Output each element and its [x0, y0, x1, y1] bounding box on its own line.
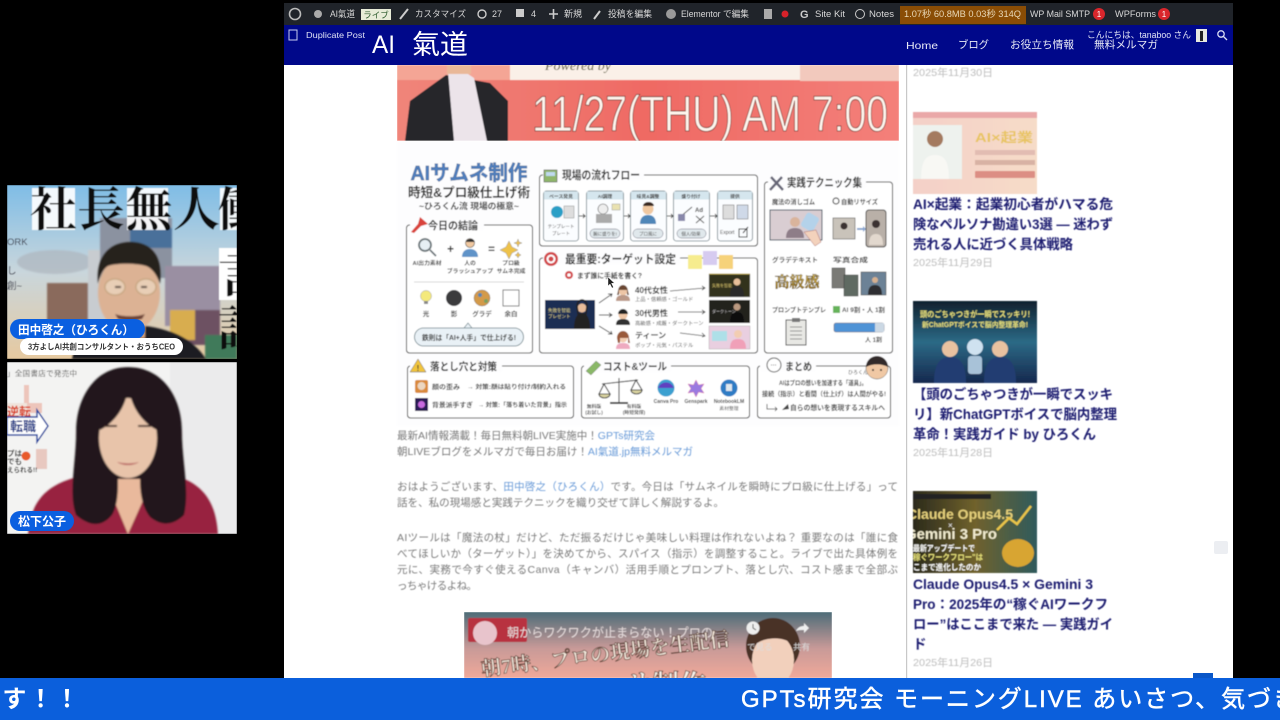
post: Claude Opus and Gemini: [905, 491, 1113, 669]
watch later caption: で見る: [747, 642, 773, 652]
step: tasting: プロ風に: [639, 232, 657, 238]
thumbnail: gold coins: [905, 491, 1037, 573]
icon: white space square: [503, 290, 519, 306]
step: tasting: 味見&調整: [637, 193, 660, 200]
icon: target: [544, 252, 558, 266]
technique: gradient text: [772, 255, 820, 291]
step: serving: Export: [720, 230, 735, 236]
summary text: [762, 378, 886, 398]
step: serving: 提供: [730, 193, 740, 200]
thumbnail: gold coins: Gemini 3 Pro: [905, 526, 997, 543]
step: plating: [674, 191, 710, 241]
icon: picture: [544, 170, 557, 182]
icon: wordpress logo: [290, 8, 300, 20]
rule bubble: 鉄則は「AI+人手」で仕上げる!: [422, 333, 516, 342]
step: plating: Ad: [695, 208, 703, 214]
host portrait: [746, 618, 800, 686]
share caption: 共有: [793, 642, 810, 652]
factor labels: 余白: [504, 309, 518, 318]
site name: AI氣道: [330, 8, 355, 19]
webcam: Matsushita: [7, 362, 237, 534]
icon: warning: !: [417, 364, 419, 373]
tool: Canva Pro: Canva Pro: [654, 399, 678, 405]
persona: women in 40s: 上品・信頼感・ゴールド: [635, 295, 693, 303]
tool: Genspark: Genspark: [684, 399, 708, 405]
script caption: Powered by: [544, 59, 612, 74]
thumbnail: dark: ダークトーン: [712, 308, 736, 314]
post title: 険なペルソナ勘違い3選 ― 迷わず: [913, 216, 1113, 232]
site kit: [800, 9, 846, 21]
icon: share: [796, 623, 809, 633]
wpforms: WPForms: [1115, 9, 1157, 19]
heading: 現場の流れフロー: [562, 168, 640, 182]
panel: practical techniques: [764, 176, 892, 353]
site kit: G: [800, 9, 809, 21]
persona: men in 30s: [616, 308, 704, 327]
post title: ロー”はここまで来た ― 実践ガイ: [913, 616, 1113, 632]
back to top tab: [1193, 673, 1213, 679]
background captions: し: [7, 266, 17, 277]
post title: 売れる人に近づく具体戦略: [913, 236, 1073, 252]
title tag: Tanaka: [20, 338, 183, 355]
tool: Genspark: [684, 380, 708, 405]
factor labels: [423, 309, 518, 318]
step: base discovery: プレート: [552, 231, 570, 237]
presenter: [72, 242, 206, 359]
persona: women in 40s: [616, 285, 693, 303]
post title: [913, 196, 1114, 252]
icon: search: [1218, 31, 1227, 40]
technique: photo composite: [832, 255, 886, 296]
icon: person brush-up: [462, 238, 478, 257]
comment counter: 4: [531, 9, 536, 19]
presenter: [28, 367, 218, 534]
promotion line: GPTs: 最新AI情報満載！毎日無料朝LIVE実施中！GPTs研究会: [397, 429, 656, 442]
panel: summary: [758, 356, 890, 418]
name tag: Matsushita: 松下公子: [18, 514, 66, 528]
book advert: えられる!!: [7, 465, 37, 474]
post title: 【頭のごちゃつきが一瞬でスッキ: [913, 386, 1113, 402]
sample thumbnail: 失敗を智能: [548, 307, 571, 314]
hero banner: [397, 59, 899, 142]
heading: コスト&ツール: [603, 361, 667, 373]
panel: today's conclusion: [406, 217, 532, 353]
post title: [913, 577, 1113, 652]
icon: site: [314, 10, 322, 18]
subheading: [565, 271, 642, 280]
icon: magnifier: [419, 239, 436, 256]
step: AI cooking: [586, 191, 624, 241]
step: base discovery: [544, 191, 578, 241]
greeting paragraph: [397, 480, 898, 509]
factor labels: グラデ: [472, 309, 492, 318]
website page background: [284, 3, 1233, 678]
icon: warning: [410, 359, 426, 373]
customize item: [400, 8, 466, 19]
technique: magic eraser: 魔法の消しゴム: [772, 197, 815, 206]
step: AI cooking: AI調理: [598, 193, 612, 200]
infographic: AI thumbnail production: [397, 141, 899, 426]
icon: sparkles: [500, 239, 522, 259]
technique: auto resize: [833, 197, 886, 247]
persona: teens: ティーン: [635, 331, 666, 340]
logo: AI: [372, 31, 395, 59]
book advert: [7, 385, 48, 474]
technique: prompt template: [772, 306, 826, 345]
wp mail smtp: WP Mail SMTP: [1030, 9, 1090, 19]
background buildings: [47, 218, 237, 359]
post title: 革命！実践ガイド by ひろくん: [913, 426, 1096, 442]
post title: リ】新ChatGPTボイスで脳内整理: [913, 406, 1117, 422]
book title glyphs: 働: [218, 185, 265, 237]
new item: 新規: [564, 9, 582, 19]
flow arrows: [579, 214, 717, 218]
thumbnail: two men and a robot: 頭のごちゃつきが一瞬でスッキリ!: [920, 309, 1030, 319]
thumbnail: AI and startups: [913, 112, 1037, 194]
name tag: Tanaka: 田中啓之（ひろくん）: [18, 322, 134, 337]
conclusion labels: 人の: [464, 260, 476, 267]
step: AI cooking: 腕に盛りを!: [593, 230, 617, 238]
tool: NotebookLM: 素材整理: [719, 405, 739, 412]
conclusion labels: プロ級: [502, 259, 520, 267]
step: base discovery: ベース発見: [549, 193, 573, 200]
greeting paragraph: 話を、私の現場感と実践テクニックを織り交ぜて詳しく解説するよ。: [397, 496, 724, 509]
technique: prompt template: プロンプトテンプレ: [772, 306, 826, 314]
notes: [856, 9, 895, 19]
post date: 2025年11月29日: [913, 256, 993, 269]
article intro text: [397, 429, 898, 592]
background captions: ORK: [7, 237, 28, 248]
elementor edit: Elementor で編集: [681, 8, 749, 19]
logo: 氣道: [412, 30, 468, 60]
row: flashy background: [415, 398, 567, 411]
row: flashy background: 背景派手すぎ: [432, 400, 474, 409]
step: base discovery: テンプレート: [548, 224, 574, 230]
book advert: 逆転: [7, 404, 31, 419]
background captions: [7, 237, 28, 292]
book title glyphs: 社長無人: [30, 185, 220, 237]
summary callout: 自らの想いを表現するスキルへ: [790, 403, 885, 412]
floating widget icon: [1214, 541, 1228, 554]
heading: 落とし穴と対策: [430, 360, 497, 373]
technique: gradient text: グラデテキスト: [772, 255, 818, 264]
technique: AI ninety percent: 人 1割: [865, 336, 882, 344]
wpforms: 1: [1162, 10, 1167, 19]
panel: on-site workflow: [540, 168, 758, 246]
presenter photo: [405, 65, 508, 141]
post: ChatGPT voice: [913, 301, 1117, 459]
name tag: Tanaka: [10, 319, 145, 339]
thumbnail: gold: 失敗を智能: [712, 282, 732, 288]
conclusion labels: [412, 259, 526, 275]
heading: まとめ: [785, 361, 812, 373]
nav: useful info: お役立ち情報: [1010, 38, 1075, 51]
thumbnail: two men and a robot: [913, 301, 1037, 383]
factor labels: 光: [423, 309, 430, 318]
post title: [913, 386, 1117, 442]
wp mail smtp: 1: [1097, 10, 1102, 19]
edit post: [594, 8, 652, 19]
conclusion labels: AI出力素材: [412, 259, 442, 267]
video caption: 朝からワクワクが止まらない！プロの: [507, 625, 713, 640]
heading: 実践テクニック集: [787, 176, 862, 190]
technique: AI ninety percent: AI 9割・人 1割: [842, 305, 885, 314]
sidebar: recent posts: [905, 66, 1117, 669]
nav: blog: ブログ: [958, 38, 989, 51]
post date: 2025年11月26日: [913, 656, 993, 669]
admin toolbar: [284, 3, 1233, 25]
overview paragraph: っちゃけるよね。: [397, 580, 477, 592]
overview paragraph: AIツールは「魔法の杖」だけど、ただ振るだけじゃ美味しい料理は作れないよね？ 重要なのは「誰に食: [397, 531, 898, 544]
factor labels: 影: [451, 309, 458, 318]
step: plating: 盛り付け: [681, 193, 701, 200]
site kit: Site Kit: [815, 9, 846, 19]
sticky notes: [688, 251, 733, 269]
book title glyphs: [30, 185, 237, 350]
thumbnail: AI and startups: AI×起業: [975, 130, 1033, 145]
technique: photo composite: 写真合成: [833, 255, 869, 264]
post title: AI×起業：起業初心者がハマる危: [913, 196, 1114, 212]
heading: 今日の結論: [428, 219, 478, 232]
icon: watch later: [746, 622, 760, 634]
thumbnail: dark: [709, 300, 750, 323]
thumbnail: gold coins: 稼ぐワークフロー"は: [913, 552, 983, 562]
icon: author avatar: [866, 356, 888, 379]
persona: teens: [616, 331, 694, 349]
panel: today's conclusion: +: [447, 242, 454, 256]
thumbnail: gold coins: Claude Opus4.5: [907, 506, 1013, 522]
summary text: 接続（指示）と看間（仕上げ）は人間がやる!: [762, 389, 886, 398]
tool: NotebookLM: [714, 380, 744, 412]
clouds: [17, 250, 93, 274]
icon: light bulb: [420, 290, 432, 304]
infographic title: ~ひろくん流 現場の極意~: [419, 201, 519, 211]
duplicate post: Duplicate Post: [306, 30, 366, 40]
icon: shadow ball: [446, 290, 462, 306]
query monitor stats: [900, 6, 1026, 24]
video headline: 朝7時、プロの現場を生配信: [480, 628, 731, 681]
query monitor stats: 1.07秒 60.8MB 0.03秒 314Q: [904, 8, 1021, 19]
icon: mouse cursor: [608, 277, 614, 288]
subheading: まず誰に手紙を書く?: [577, 271, 642, 280]
icon: tools: [770, 177, 783, 190]
customize item: カスタマイズ: [415, 8, 466, 19]
logo: [372, 30, 468, 60]
live badge: ライブ: [363, 10, 389, 20]
nav: home: Home: [906, 40, 938, 52]
new item: [549, 9, 582, 19]
greeting paragraph: おはようございます、田中啓之（ひろくん）です。今日は「サムネイルを瞬時にプロ級に仕上げる」って: [397, 480, 898, 493]
sample thumbnail: [545, 300, 595, 329]
overview paragraph: 元に、実務で今すぐ使えるCanva（キャンバ）活用手順とプロンプト、落とし穴、コスト感まで全部ぶ: [397, 563, 898, 576]
tool: NotebookLM: NotebookLM: [714, 399, 744, 405]
post title: Claude Opus4.5 × Gemini 3: [913, 577, 1094, 592]
icon: money: [586, 361, 601, 375]
technique: auto resize: 自動リサイズ: [841, 197, 878, 206]
scale labels: [585, 403, 646, 416]
row: flashy background: → 対策:「落ち着いた背景」指示: [478, 401, 567, 409]
author caption: ひろくん: [848, 370, 868, 376]
title tag: Tanaka: 3方よしAI共創コンサルタント・おうちCEO: [28, 342, 175, 352]
step: tasting: [630, 191, 666, 241]
branch arrows: [599, 294, 612, 334]
promotion line: newsletter: 朝LIVEブログをメルマガで毎日お届け！AI氣道.jp無料メルマガ: [397, 445, 693, 458]
conclusion labels: ブラッシュアップ: [447, 267, 493, 275]
update counter: 27: [492, 9, 502, 19]
bottom ticker: [0, 678, 1280, 720]
infographic title: 時短&プロ級仕上げ術: [408, 185, 530, 200]
overview paragraph: べてほしいか（ターゲット）」を決めてから、スパイス（指示）を調整すること。ライブで出た具体例を: [397, 547, 898, 560]
icon: gradient palette: [474, 290, 490, 306]
icon: scales: [599, 378, 642, 403]
post title: ド: [913, 637, 926, 652]
site header: [284, 25, 1233, 65]
sidebar divider: [906, 65, 907, 678]
thumbnail: gold coins: こまで進化したのか: [913, 562, 981, 572]
book title glyphs: 言: [218, 251, 265, 303]
thumbnail: gold coins: 最新アップデートで: [913, 543, 975, 553]
live chip: [468, 618, 527, 645]
thumbnail: gold coins: ×: [948, 521, 953, 530]
icon: speech bubble: [767, 358, 781, 372]
book advert: 転職: [10, 419, 36, 434]
infographic title: [408, 162, 530, 211]
yoast and red status dot: [764, 9, 788, 19]
comment counter: [516, 9, 536, 19]
infographic title: AIサムネ制作: [410, 162, 528, 185]
step: serving: [718, 191, 752, 241]
previous post date: 2025年11月30日: [913, 66, 993, 79]
persona: teens: ポップ・元気・パステル: [635, 341, 694, 349]
panel: pitfalls and countermeasures: [408, 359, 574, 418]
wpforms: [1115, 8, 1170, 20]
avatar: [1196, 29, 1207, 42]
post: AI entrepreneurship: [913, 112, 1114, 269]
row: distorted face: [415, 380, 566, 393]
name tag: Matsushita: [10, 511, 74, 531]
technique: gradient text: 高級感: [774, 273, 820, 291]
background captions: 創~: [7, 281, 23, 292]
post title: Pro：2025年の“稼ぐAIワークフ: [913, 596, 1108, 612]
scale labels: 有料版: [627, 403, 641, 410]
scale labels: (時短発揮): [623, 409, 646, 416]
icon: pushpin: [411, 217, 428, 233]
thumbnail: gold: [709, 274, 750, 297]
book advert: でも: [7, 457, 22, 466]
overview paragraph: [397, 531, 898, 592]
post date: 2025年11月28日: [913, 446, 993, 459]
panel: cost and tools: [582, 360, 750, 418]
tool: Canva Pro: [654, 380, 678, 405]
persona arrows: [670, 286, 705, 337]
scale labels: 無料版: [587, 403, 601, 410]
summary text: AIはプロの想いを加速する「道具」。: [779, 378, 867, 387]
step: plating: 個人/効果: [681, 230, 701, 238]
background caption: 」全国書店で発売中: [7, 368, 77, 378]
date and time: 11/27(THU) AM 7:00: [532, 86, 888, 142]
book advert: プは: [7, 449, 22, 458]
edit post: 投稿を編集: [608, 8, 652, 19]
heading: 最重要:ターゲット設定: [565, 252, 676, 266]
scale labels: (お試し): [585, 409, 603, 416]
wp mail smtp: [1030, 8, 1105, 20]
conclusion labels: サムネ完成: [497, 267, 526, 275]
persona: men in 30s: 30代男性: [635, 308, 668, 318]
thumbnail: two men and a robot: 新ChatGPTボイスで脳内整理革命!: [922, 320, 1028, 329]
update counter: [478, 9, 502, 19]
panel: most important, target setting: [540, 251, 758, 353]
book title glyphs: 証: [218, 304, 265, 356]
persona: women in 40s: 40代女性: [635, 285, 668, 295]
thumbnail: pastel: [709, 326, 750, 349]
notes: Notes: [869, 9, 895, 19]
technique: AI ninety percent: [833, 305, 885, 344]
embedded video thumbnail: [464, 612, 832, 678]
video headline second line: サ制作: [625, 670, 706, 700]
panel: today's conclusion: =: [488, 242, 495, 256]
webcam: Tanaka: [7, 185, 237, 359]
row: distorted face: 顔の歪み: [432, 382, 461, 391]
persona: men in 30s: 高級感・成厳・ダークトーン: [635, 319, 704, 327]
sample thumbnail: プレゼント: [548, 313, 570, 320]
row: distorted face: → 対策:顔は貼り付け/制約入れる: [467, 383, 566, 391]
nav: newsletter: 無料メルマガ: [1094, 38, 1158, 51]
technique: magic eraser: [770, 197, 822, 246]
greeting: こんにちは、tanaboo さん: [1087, 30, 1191, 40]
